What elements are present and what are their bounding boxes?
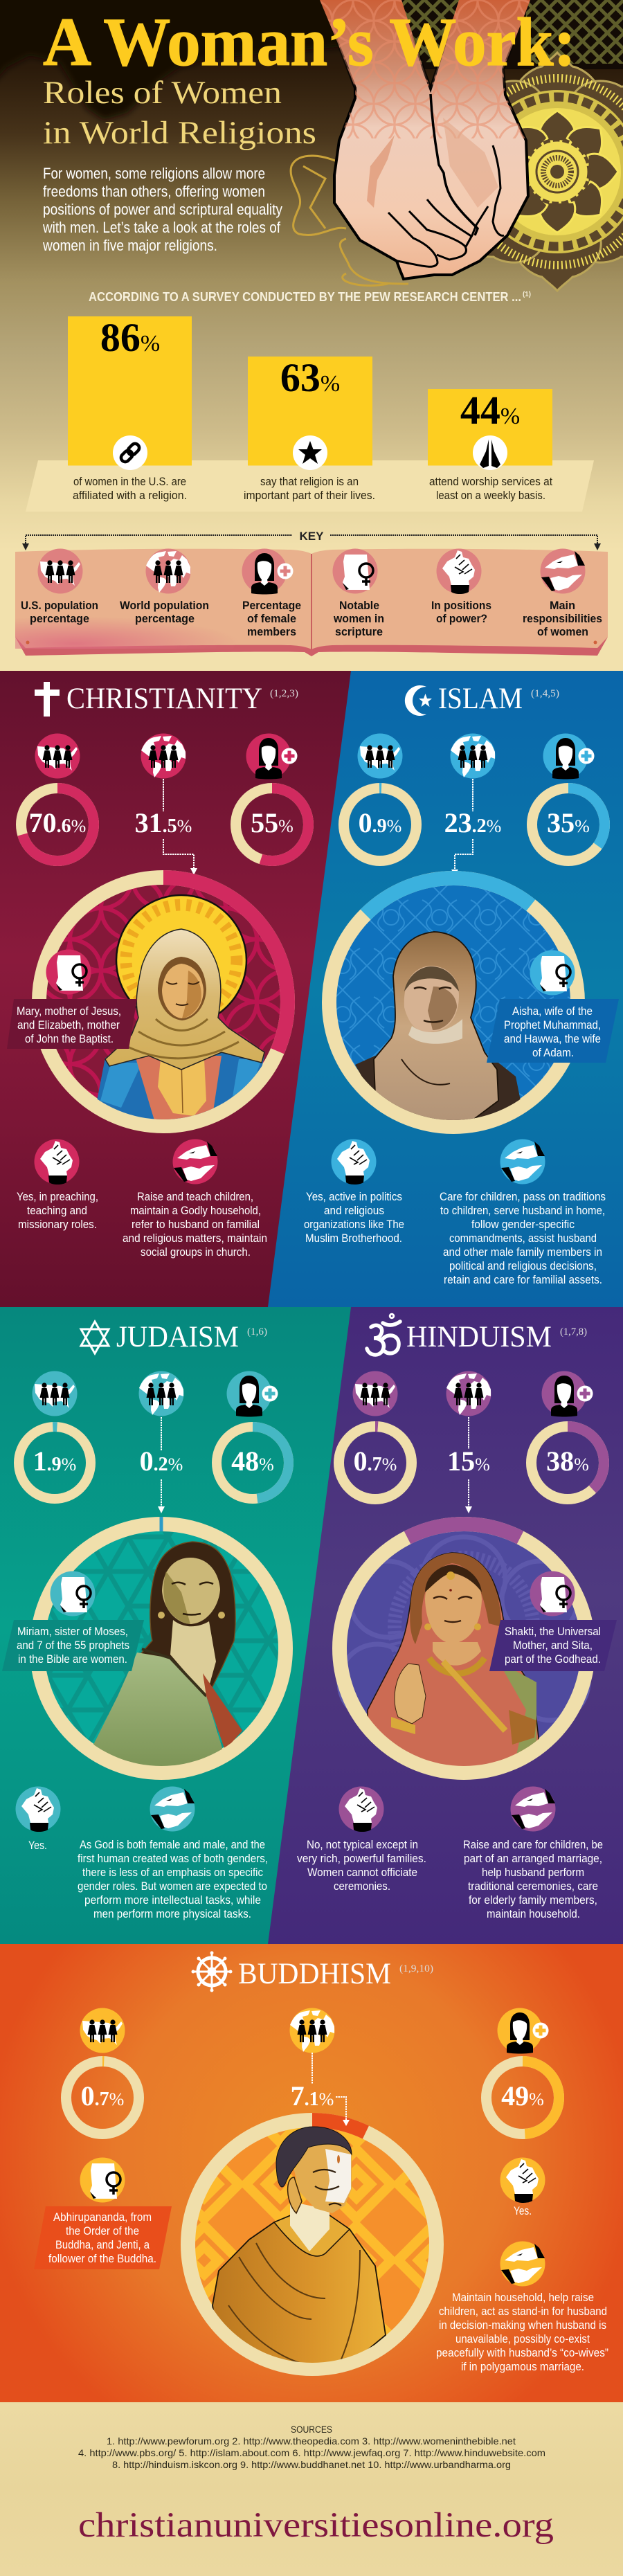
panel: Hinduism <box>297 1315 623 1920</box>
icon: power <box>331 1140 377 1185</box>
connector arrow <box>163 779 197 875</box>
text: responsibilities <box>123 1191 267 1259</box>
heading: Islam: ISLAM <box>438 683 523 715</box>
key icon: responsibilities <box>540 548 586 594</box>
text: responsibilities: Raise and care for children, be <box>463 1839 603 1851</box>
connector arrow <box>465 1417 472 1513</box>
text: power: missionary roles. <box>18 1218 97 1231</box>
donut: female 55% <box>235 788 309 861</box>
icon: star of David <box>81 1322 109 1353</box>
icon: cross <box>35 682 60 717</box>
text: responsibilities: peacefully with husband’s “co-wives” <box>436 2347 608 2359</box>
stat captions: least on a weekly basis. <box>436 489 545 502</box>
callout: Miriam: Miriam, sister of Moses, <box>17 1625 128 1638</box>
text: responsibilities: and other male family members in <box>443 1246 602 1259</box>
text: responsibilities: first human created was of both genders, <box>78 1853 268 1865</box>
key labels: Main <box>550 600 575 612</box>
callout: Miriam: and 7 of the 55 prophets <box>17 1639 129 1652</box>
callout: Mary: and Elizabeth, mother <box>17 1019 120 1032</box>
panel: Islam <box>278 683 623 1286</box>
key heading with arrows: KEY <box>300 530 324 543</box>
sources: 8. http://hinduism.iskcon.org 9. http://www.buddhanet.net 10. http://www.urbandharma.org <box>112 2459 511 2470</box>
icon: U.S. population <box>357 734 403 778</box>
text: power: and religious <box>324 1205 384 1217</box>
icon: U.S. population <box>353 1371 397 1416</box>
icon: om <box>367 1315 400 1355</box>
stat bar: 86%: 86% <box>100 315 160 360</box>
text: power <box>17 1191 98 1231</box>
key labels: Notable <box>339 600 379 612</box>
panel: Christianity <box>0 671 351 1307</box>
text: power: Muslim Brotherhood. <box>305 1232 402 1245</box>
donut: U.S. 0.9%: 0.9% <box>359 807 401 838</box>
stat: world 23.2%: 23.2% <box>444 807 501 838</box>
stat: world 31.5%: 31.5% <box>135 807 192 838</box>
text: power: Yes. <box>514 2205 532 2217</box>
text: responsibilities <box>440 1191 606 1286</box>
text: power <box>297 1839 426 1893</box>
site name: christianuniversitiesonline.org <box>78 2506 554 2545</box>
panel: key book <box>15 548 608 656</box>
text: responsibilities <box>78 1839 268 1920</box>
heading: Hinduism: HINDUISM <box>406 1321 552 1353</box>
callout: Shakti: Mother, and Sita, <box>513 1639 593 1652</box>
key heading with arrows <box>22 530 601 550</box>
icon: power <box>35 1140 79 1185</box>
icon: dharma wheel <box>191 1951 233 1992</box>
dark torn backdrop <box>0 0 415 120</box>
text: power: No, not typical except in <box>307 1839 418 1851</box>
icon: notable women <box>80 2157 125 2203</box>
text: responsibilities: unavailable, possibly co-exist <box>455 2333 590 2345</box>
key labels: responsibilities <box>523 613 602 625</box>
heading: Christianity: (1,2,3) <box>270 688 298 699</box>
portrait: Mary in ring <box>39 878 288 1126</box>
text: responsibilities: men perform more physical tasks. <box>93 1908 251 1920</box>
key labels: members <box>247 626 296 638</box>
text: responsibilities: maintain a Godly household, <box>130 1205 261 1217</box>
stat captions <box>73 475 552 502</box>
icon: U.S. population <box>32 1371 78 1416</box>
text: responsibilities <box>436 2291 608 2373</box>
text: responsibilities: part of an arranged marriage, <box>464 1853 602 1865</box>
text: responsibilities: perform more intellectual tasks, while <box>84 1894 261 1907</box>
donut: U.S. 70.6%: 70.6% <box>29 807 86 838</box>
heading: Christianity: CHRISTIANITY <box>66 683 262 715</box>
icon: power <box>15 1786 61 1832</box>
connector arrow <box>451 779 473 876</box>
donut: female 35%: 35% <box>547 807 590 838</box>
text: responsibilities: commandments, assist husband <box>449 1232 597 1245</box>
key labels: of power? <box>436 613 487 625</box>
key icon: positions of power <box>436 548 482 594</box>
icon: notable women <box>530 1571 575 1616</box>
key labels: women in <box>333 613 384 625</box>
donut: female 48% <box>217 1427 289 1499</box>
donut: U.S. 70.6% <box>21 788 94 861</box>
text: responsibilities: for elderly family members, <box>469 1894 597 1907</box>
portrait: Aisha in ring <box>322 871 585 1134</box>
icon: power <box>339 1786 383 1832</box>
icon: responsibilities <box>500 1140 545 1184</box>
panel background: Hinduism <box>0 1307 623 1944</box>
caption strip <box>26 460 594 512</box>
portrait: Shakti in ring <box>332 1517 594 1780</box>
text: power: Yes, in preaching, <box>17 1191 98 1203</box>
donut: U.S. 0.7% <box>66 2062 138 2134</box>
donut: female 49% <box>486 2062 559 2134</box>
callout: Mary <box>7 999 137 1049</box>
knot ornament <box>291 156 408 285</box>
lattice ornament <box>395 0 623 69</box>
callout: Abhirupananda: follower of the Buddha. <box>48 2253 156 2265</box>
text: responsibilities: social groups in church. <box>141 1246 251 1259</box>
donut: female 35% <box>532 788 605 861</box>
donut: U.S. 0.7% <box>339 1426 411 1499</box>
text: responsibilities: maintain household. <box>487 1908 580 1920</box>
icon: world population <box>450 734 496 778</box>
heading: Islam: (1,4,5) <box>531 688 559 699</box>
callout: Shakti: part of the Godhead. <box>505 1653 601 1666</box>
text: responsibilities: Raise and teach children, <box>137 1191 253 1203</box>
text: responsibilities: political and religious decisions, <box>449 1260 597 1272</box>
subtitle: in World Religions <box>43 115 316 151</box>
key icon: female members <box>242 548 294 594</box>
panel: Judaism <box>0 1307 351 1944</box>
key labels: scripture <box>335 626 383 638</box>
key labels: of female <box>247 613 296 625</box>
key labels: percentage <box>135 613 195 625</box>
text: responsibilities: there is less of an emphasis on specific <box>82 1866 263 1879</box>
key labels: percentage <box>30 613 89 625</box>
donut: U.S. 0.7%: 0.7% <box>354 1445 397 1477</box>
stat bar: 63% <box>248 355 372 470</box>
key labels: World population <box>120 600 209 612</box>
heading: Buddhism: (1,9,10) <box>399 1963 433 1974</box>
text: responsibilities: traditional ceremonies, care <box>468 1880 598 1893</box>
text: responsibilities: retain and care for familial assets. <box>444 1274 602 1286</box>
callout: Shakti <box>489 1620 617 1671</box>
text: responsibilities: children, act as stand-in for husband <box>439 2305 607 2318</box>
icon: female members <box>541 1371 593 1416</box>
text: power: Yes. <box>28 1839 47 1852</box>
text: responsibilities: gender roles. But women are expected to <box>78 1880 267 1893</box>
text: power: Yes, active in politics <box>306 1191 402 1203</box>
icon: female members <box>543 734 594 780</box>
stat captions: affiliated with a religion. <box>73 489 187 502</box>
stat captions: important part of their lives. <box>244 489 375 502</box>
stat bar: 44%: 44% <box>460 388 520 433</box>
icon: notable women <box>46 950 91 994</box>
callout: Aisha: Aisha, wife of the <box>512 1005 593 1018</box>
icon: world population <box>446 1371 491 1416</box>
icon: crescent and star <box>405 685 432 716</box>
key icon: notable women <box>332 548 378 594</box>
callout: Aisha: Prophet Muhammad, <box>504 1019 601 1032</box>
stat captions: attend worship services at <box>429 475 552 488</box>
key icon: world population <box>145 548 191 594</box>
callout: Abhirupananda: the Order of the <box>66 2225 139 2237</box>
text: responsibilities: to children, serve husband in home, <box>440 1205 605 1217</box>
heading: Judaism: (1,6) <box>247 1326 267 1337</box>
icon: world population <box>289 2008 335 2053</box>
key icon: U.S. population <box>37 548 83 594</box>
donut: U.S. 0.9% <box>343 788 417 861</box>
sources: 1. http://www.pewforum.org 2. http://www.theopedia.com 3. http://www.womeninthebible.net <box>107 2435 516 2447</box>
stat: world 15%: 15% <box>447 1445 490 1477</box>
icon: responsibilities <box>500 2242 545 2286</box>
donut: U.S. 0.7%: 0.7% <box>81 2080 124 2111</box>
illustration: joined hands <box>318 0 533 279</box>
text: responsibilities: Maintain household, help raise <box>452 2291 594 2304</box>
stat captions: say that religion is an <box>260 475 359 488</box>
icon: U.S. population <box>80 2008 125 2053</box>
text: responsibilities: in decision-making when husband is <box>439 2319 606 2332</box>
text: responsibilities: follow gender-specific <box>471 1218 575 1231</box>
portrait: Miriam in ring <box>37 1517 285 1772</box>
panel background: Islam <box>0 671 623 1307</box>
panel: header background <box>0 0 623 671</box>
intro text: freedoms than others, offering women <box>43 183 265 200</box>
stat bar: 44% <box>428 388 552 470</box>
text: responsibilities: refer to husband on familial <box>132 1218 260 1231</box>
text: responsibilities: and religious matters, maintain <box>123 1232 267 1245</box>
icon: female members <box>227 1371 278 1416</box>
intro text: with men. Let’s take a look at the roles of <box>42 219 281 236</box>
donut: female 55%: 55% <box>251 807 294 838</box>
icon: female members <box>497 2008 548 2053</box>
key labels: of women <box>537 626 588 638</box>
survey heading: ACCORDING TO A SURVEY CONDUCTED BY THE PEW RESEARCH CENTER ... <box>89 290 521 304</box>
icon: responsibilities <box>150 1786 195 1832</box>
text: responsibilities: As God is both female and male, and the <box>80 1839 265 1851</box>
text: power: very rich, powerful families. <box>297 1853 426 1865</box>
icon: power <box>500 2157 545 2203</box>
heading: Buddhism: BUDDHISM <box>238 1958 391 1990</box>
key labels <box>21 600 602 638</box>
text: power: Women cannot officiate <box>307 1866 417 1879</box>
stat: world 0.2%: 0.2% <box>140 1445 183 1477</box>
callout: Mary: of John the Baptist. <box>25 1033 114 1045</box>
text: responsibilities <box>463 1839 603 1920</box>
stat captions: of women in the U.S. are <box>73 475 186 488</box>
connector arrow <box>158 1417 165 1513</box>
key labels: U.S. population <box>21 600 98 612</box>
text: power <box>304 1191 404 1245</box>
text: responsibilities: Care for children, pass on traditions <box>440 1191 606 1203</box>
text: power: ceremonies. <box>334 1880 390 1893</box>
stat bar: 63%: 63% <box>280 355 340 400</box>
icon: U.S. population <box>35 734 80 778</box>
callout: Abhirupananda: Buddha, and Jenti, a <box>55 2239 150 2251</box>
callout: Aisha: of Adam. <box>532 1047 574 1059</box>
text: power: organizations like The <box>304 1218 404 1231</box>
key labels: In positions <box>431 600 491 612</box>
icon: world population <box>138 1371 184 1416</box>
icon: female members <box>246 734 298 780</box>
intro text <box>42 165 282 254</box>
donut: female 48%: 48% <box>231 1445 274 1477</box>
icon: notable women <box>50 1571 96 1616</box>
intro text: women in five major religions. <box>42 237 217 254</box>
sources <box>78 2424 545 2470</box>
donut: female 38%: 38% <box>546 1445 589 1477</box>
stat bar: 86% <box>68 315 192 470</box>
heading: Judaism: JUDAISM <box>116 1321 239 1353</box>
donut: female 38% <box>532 1426 604 1499</box>
callout: Abhirupananda <box>34 2206 172 2269</box>
icon: notable women <box>530 950 575 996</box>
icon: world population <box>141 734 186 778</box>
icon: responsibilities <box>173 1140 217 1184</box>
panel: Buddhism <box>0 1944 623 2402</box>
sources: 4. http://www.pbs.org/ 5. http://islam.about.com 6. http://www.jewfaq.org 7. http://www.hinduwebsite.com <box>78 2447 545 2458</box>
survey heading: (1) <box>523 291 531 298</box>
text: responsibilities: help husband perform <box>482 1866 584 1879</box>
callout: Mary: Mary, mother of Jesus, <box>17 1005 121 1018</box>
subtitle: Roles of Women <box>43 75 282 111</box>
intro text: positions of power and scriptural equality <box>43 201 282 218</box>
callout: Abhirupananda: Abhirupananda, from <box>53 2211 152 2224</box>
connector arrow <box>312 2053 350 2126</box>
subtitle <box>43 75 316 151</box>
title: A Woman’s Work: <box>43 3 576 80</box>
callout: Shakti: Shakti, the Universal <box>505 1625 601 1638</box>
donut: U.S. 1.9% <box>17 1425 93 1501</box>
panel: footer <box>0 2402 623 2576</box>
key labels: Percentage <box>242 600 301 612</box>
callout: Aisha: and Hawwa, the wife <box>504 1033 601 1045</box>
intro text: For women, some religions allow more <box>43 165 265 182</box>
text: power: teaching and <box>27 1205 87 1217</box>
sources: SOURCES <box>291 2424 332 2435</box>
donut: female 49%: 49% <box>501 2080 544 2111</box>
portrait: Buddha in ring <box>188 2120 436 2369</box>
text: responsibilities: if in polygamous marriage. <box>461 2361 584 2373</box>
callout: Miriam <box>2 1620 144 1671</box>
stat: world 7.1%: 7.1% <box>291 2080 334 2111</box>
icon: responsibilities <box>511 1786 555 1832</box>
heading: Hinduism: (1,7,8) <box>560 1326 587 1337</box>
donut: U.S. 1.9%: 1.9% <box>33 1445 76 1477</box>
mandala ornament <box>438 53 623 291</box>
callout: Miriam: in the Bible are women. <box>18 1653 127 1666</box>
callout: Aisha <box>487 999 619 1063</box>
